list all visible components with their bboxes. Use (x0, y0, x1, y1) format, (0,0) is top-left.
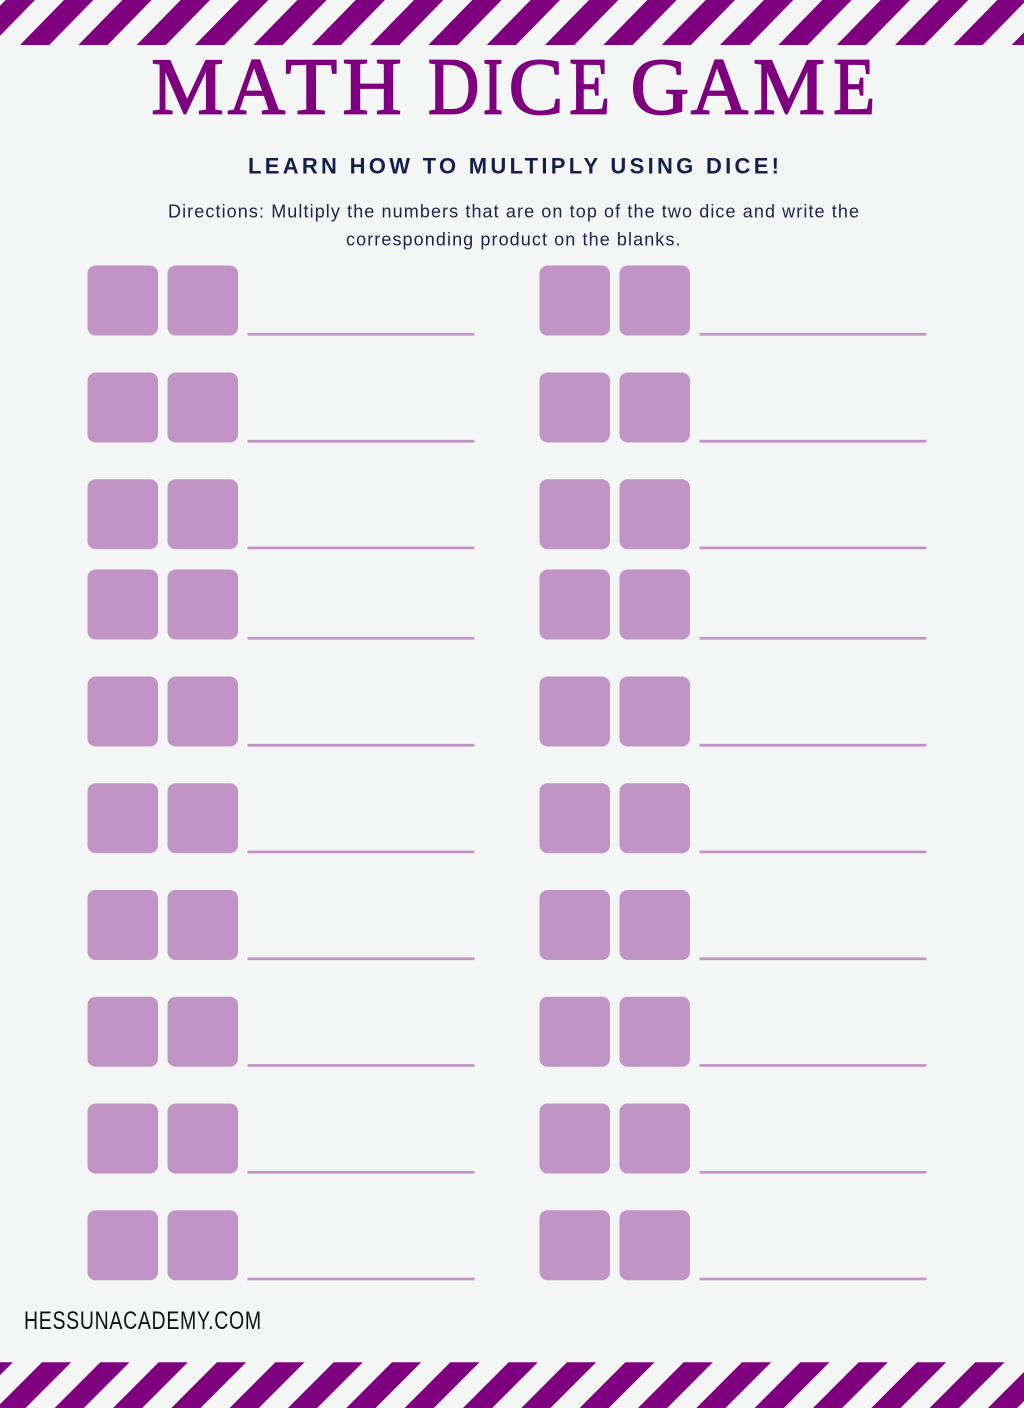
title: A (691, 42, 748, 132)
directions text: corresponding product on the blanks. (346, 230, 680, 250)
top striped border (0, 0, 1024, 45)
title: M (151, 42, 224, 132)
title: E (833, 42, 875, 132)
title (151, 42, 875, 132)
directions text (168, 201, 859, 250)
bottom striped border (0, 1362, 1024, 1408)
subtitle: LEARN HOW TO MULTIPLY USING DICE! (248, 154, 779, 178)
title: T (285, 42, 337, 132)
title: D (428, 42, 479, 132)
title: A (228, 42, 285, 132)
worksheet rows: dice pairs and answer blanks (88, 266, 926, 1280)
title: M (753, 42, 825, 132)
title: I (483, 42, 503, 132)
title: E (569, 42, 610, 132)
directions text: Directions: Multiply the numbers that are on top of the two dice and write the (168, 201, 859, 221)
title: C (509, 42, 564, 132)
title: G (630, 42, 689, 132)
title: H (342, 42, 402, 132)
footer website: HESSUNACADEMY.COM (24, 1307, 261, 1335)
